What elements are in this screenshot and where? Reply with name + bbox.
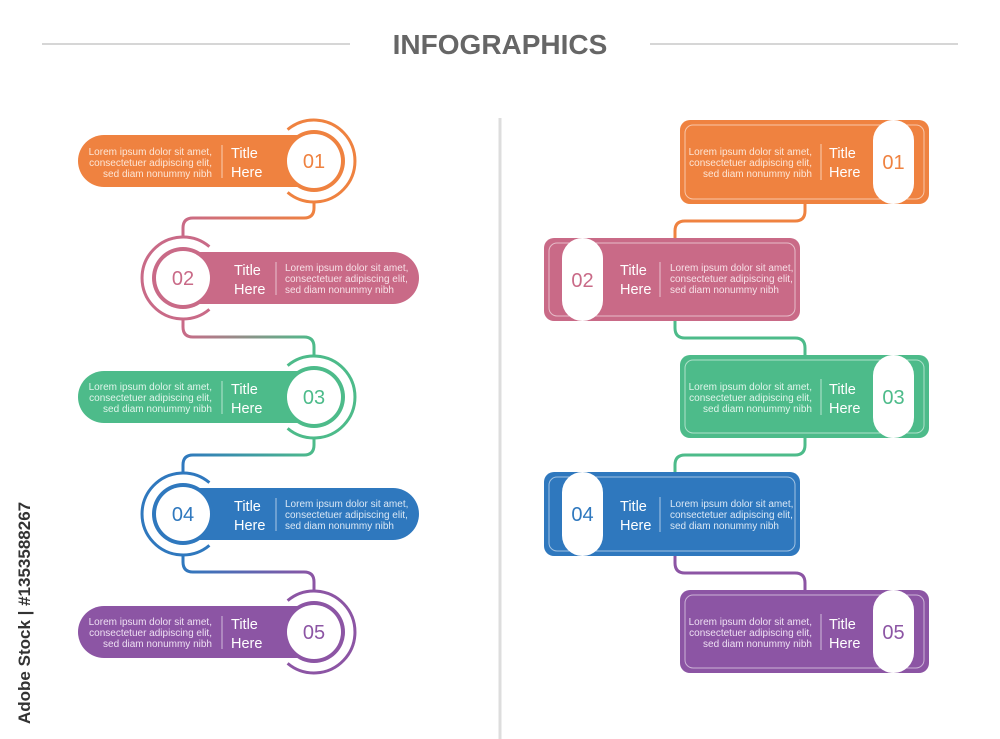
left step 04: consectetuer adipiscing elit,: [285, 510, 408, 521]
right connectors: [675, 204, 805, 590]
left step 01: sed diam nonummy nibh: [103, 169, 212, 180]
left step 02: Here: [234, 282, 265, 298]
left connectors: [183, 202, 314, 591]
left step 02: 02: [172, 268, 194, 290]
left step 05: Title: [231, 617, 258, 633]
left step 03: sed diam nonummy nibh: [103, 404, 212, 415]
title: INFOGRAPHICS: [393, 29, 607, 60]
right step 05: sed diam nonummy nibh: [703, 639, 812, 650]
right step 04: sed diam nonummy nibh: [670, 521, 779, 532]
left step 05: sed diam nonummy nibh: [103, 639, 212, 650]
right step 04: [544, 472, 800, 556]
right step 01: 01: [882, 152, 905, 174]
right step 01: Title: [829, 146, 856, 162]
right step 04: Here: [620, 518, 651, 534]
right step 04: consectetuer adipiscing elit,: [670, 510, 793, 521]
left step 04: Lorem ipsum dolor sit amet,: [285, 499, 408, 510]
right step 04: Title: [620, 499, 647, 515]
left step 03: 03: [303, 387, 325, 409]
left step 04: Title: [234, 499, 261, 515]
left step 03: [78, 356, 355, 438]
left step 05: 05: [303, 622, 325, 644]
left step 01: consectetuer adipiscing elit,: [89, 158, 212, 169]
right step 03: Title: [829, 382, 856, 398]
right step 01: consectetuer adipiscing elit,: [689, 158, 812, 169]
right step 02: consectetuer adipiscing elit,: [670, 274, 793, 285]
right step 05: consectetuer adipiscing elit,: [689, 628, 812, 639]
left step 01: [78, 120, 355, 202]
right step 02: Here: [620, 282, 651, 298]
right step 03: 03: [882, 387, 905, 409]
left step 04: Here: [234, 518, 265, 534]
right step 03: [680, 355, 929, 438]
right step 05: 05: [882, 622, 905, 644]
right step 05: Lorem ipsum dolor sit amet,: [689, 617, 812, 628]
right step 01: Here: [829, 165, 860, 181]
right step 02: Title: [620, 263, 647, 279]
right step 04: 04: [571, 504, 594, 526]
left step 04: [142, 473, 419, 555]
right step 02: Lorem ipsum dolor sit amet,: [670, 263, 793, 274]
watermark: Adobe Stock | #1353588267: [15, 502, 34, 724]
right step 03: sed diam nonummy nibh: [703, 404, 812, 415]
right step 01: sed diam nonummy nibh: [703, 169, 812, 180]
left step 01: Title: [231, 146, 258, 162]
left step 02: [142, 237, 419, 319]
left step 01: Here: [231, 165, 262, 181]
right step 02: [544, 238, 800, 321]
left step 04: 04: [172, 504, 194, 526]
left step 03: Here: [231, 401, 262, 417]
left step 02: Title: [234, 263, 261, 279]
left step 04: sed diam nonummy nibh: [285, 521, 394, 532]
left step 03: Lorem ipsum dolor sit amet,: [89, 382, 212, 393]
right step 05: Here: [829, 636, 860, 652]
right step 03: Lorem ipsum dolor sit amet,: [689, 382, 812, 393]
right step 01: [680, 120, 929, 204]
left step 05: [78, 591, 355, 673]
right step 03: consectetuer adipiscing elit,: [689, 393, 812, 404]
left step 05: Lorem ipsum dolor sit amet,: [89, 617, 212, 628]
left step 05: consectetuer adipiscing elit,: [89, 628, 212, 639]
left step 02: consectetuer adipiscing elit,: [285, 274, 408, 285]
right step 04: Lorem ipsum dolor sit amet,: [670, 499, 793, 510]
right step 05: [680, 590, 929, 673]
left step 03: Title: [231, 382, 258, 398]
right step 02: 02: [571, 270, 594, 292]
left step 01: 01: [303, 151, 325, 173]
left step 05: Here: [231, 636, 262, 652]
right step 05: Title: [829, 617, 856, 633]
left step 01: Lorem ipsum dolor sit amet,: [89, 147, 212, 158]
right step 03: Here: [829, 401, 860, 417]
right step 01: Lorem ipsum dolor sit amet,: [689, 147, 812, 158]
left step 02: Lorem ipsum dolor sit amet,: [285, 263, 408, 274]
left step 03: consectetuer adipiscing elit,: [89, 393, 212, 404]
left step 02: sed diam nonummy nibh: [285, 285, 394, 296]
right step 02: sed diam nonummy nibh: [670, 285, 779, 296]
